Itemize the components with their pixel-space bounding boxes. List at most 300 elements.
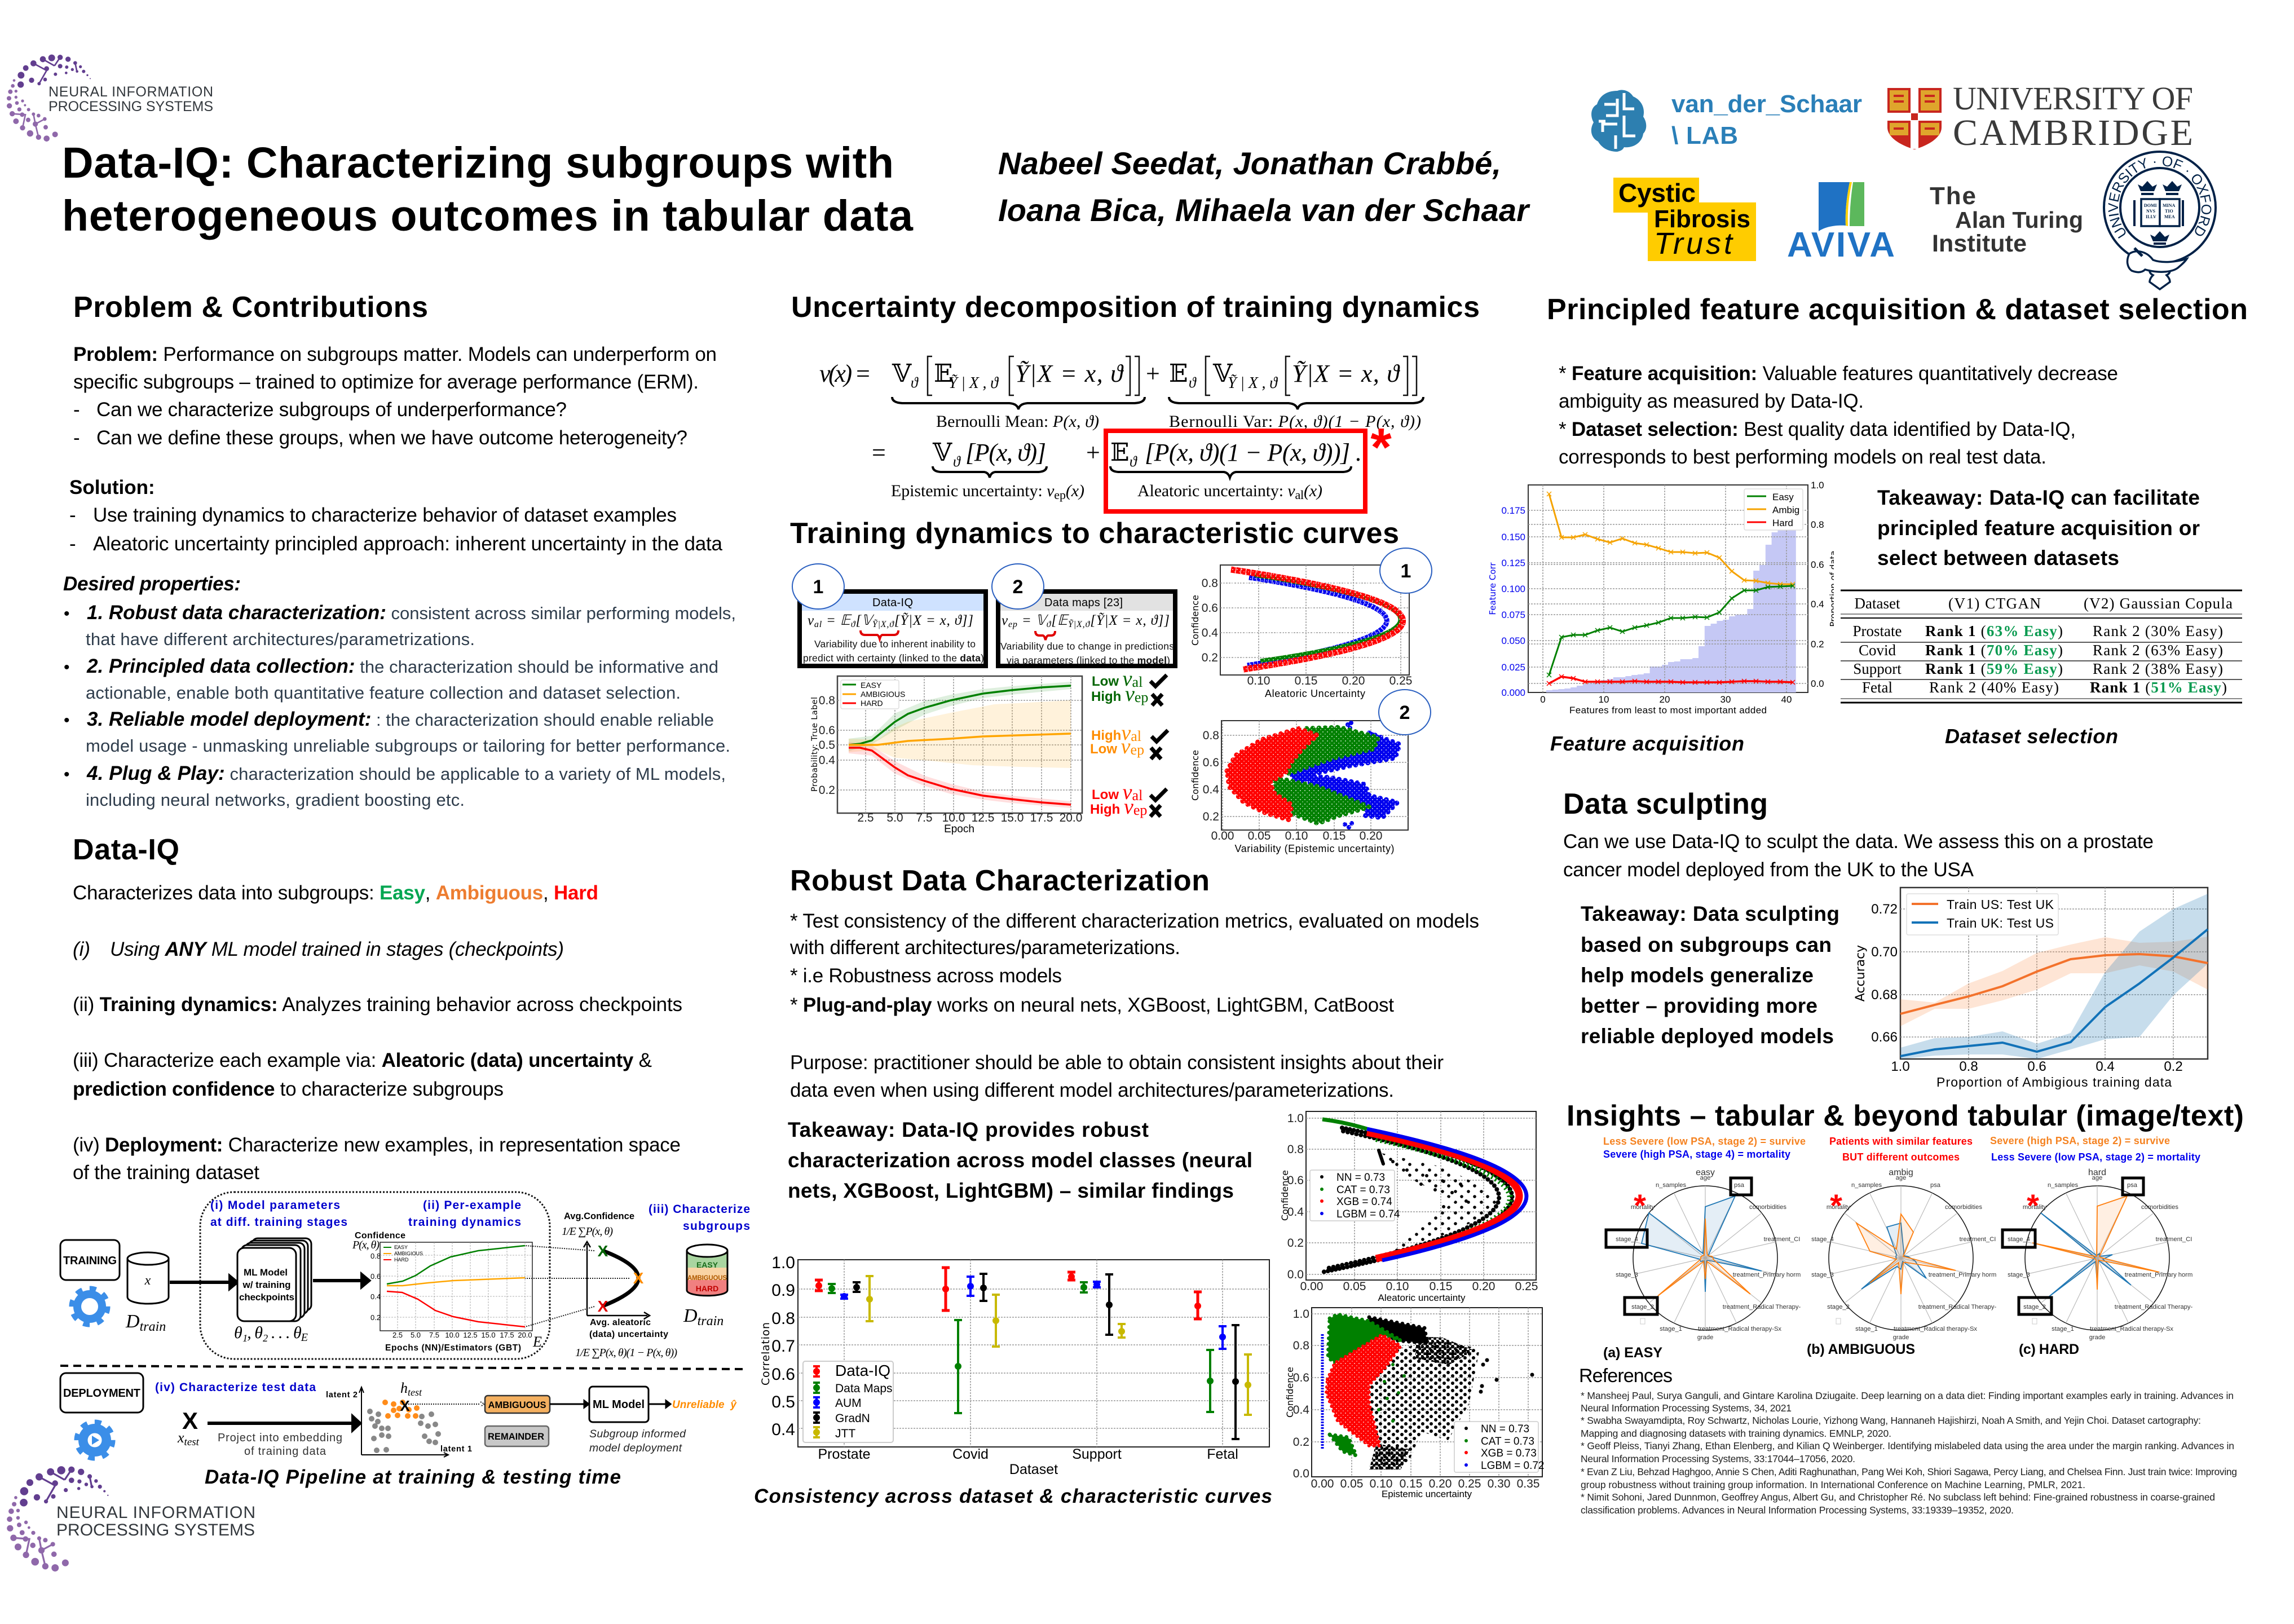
chart: multi-model aleatoric scatter: 1.0: [1287, 1112, 1304, 1125]
text block: Can we use Data-IQ to sculpt the data. We assess this on a prostate: [1563, 831, 2154, 853]
text block: steps: (iv) Deployment: Characterize new examples, in representation space: [73, 1134, 681, 1156]
radar: hard: stage_3: [2008, 1272, 2030, 1278]
insight notes: ambiguous: Patients with similar features: [1829, 1136, 1973, 1147]
chart: multi-model aleatoric scatter: 0.05: [1343, 1280, 1366, 1293]
heading: Data-IQ: [73, 833, 179, 866]
legend: Hard: [1772, 518, 1793, 528]
legend: CAT = 0.73: [1481, 1436, 1534, 1448]
panel: feature acquisition and dataset selection: [1488, 293, 2248, 755]
text block: desired properties: •: [64, 711, 70, 730]
chart: accuracy by proportion: 0.68: [1871, 987, 1898, 1003]
chart: confidence vs aleatoric: 0.4: [1202, 626, 1218, 639]
text block: desired properties: •: [64, 604, 70, 623]
equation: +: [1146, 360, 1160, 387]
text block: desired properties: 4. Plug & Play: characterization should be applicable to a variety of ML models,: [86, 762, 726, 784]
takeaway: nets, XGBoost, LightGBM) – similar findings: [788, 1179, 1234, 1202]
insight notes: hard: Less Severe (low PSA, stage 2) = mortality: [1991, 1151, 2200, 1163]
box: Data maps formula: Ỹ|X,ϑ: [1068, 619, 1091, 629]
label: projection: [218, 1432, 342, 1458]
annotation: hard: ep: [1133, 802, 1147, 818]
arrow: model to output: [649, 1401, 670, 1407]
box: Data-IQ formula: [Ỹ|X = x, ϑ]]: [894, 612, 973, 628]
text block: steps: (iii) Characterize each example via: Aleatoric (data) uncertainty &: [73, 1049, 652, 1071]
text block: * i.e Robustness across models: [790, 965, 1062, 987]
insight notes: ambiguous: [1829, 1136, 1973, 1163]
annotation: easy: Low v: [1092, 667, 1132, 691]
red asterisk: *: [1370, 417, 1392, 478]
chart: per-example confidence curves: 0.4: [370, 1292, 381, 1301]
labels: pipeline steps i and ii: [210, 1199, 521, 1229]
panel: problem and contributions: [63, 291, 736, 810]
radar: hard: hard: [2088, 1168, 2106, 1177]
reference list: Mapping and diagnosing datasets with training dynamics. EMNLP, 2020.: [1581, 1428, 1891, 1439]
test point: X: [182, 1407, 198, 1434]
chart: confidence vs aleatoric: Confidence: [1190, 595, 1201, 646]
chart: multi-model epistemic scatter: 0.05: [1340, 1477, 1363, 1490]
annotation: ambiguous: [1090, 721, 1168, 759]
text block: desired properties: •: [64, 658, 70, 677]
logo: Aviva: [1787, 182, 1895, 264]
logo: NeurIPS bottom: [7, 1466, 255, 1572]
chart: confidence vs variability: 0.4: [1203, 783, 1219, 796]
logo: Alan Turing Institute: Alan Turing: [1955, 207, 2083, 233]
text block: [1559, 363, 2118, 468]
radar: hard: stage_4: [2008, 1236, 2030, 1243]
text block: Purpose: practitioner should be able to obtain consistent insights about their: [790, 1052, 1444, 1074]
stack: ML model checkpoints: w/ training: [242, 1279, 291, 1290]
insight notes: easy: Less Severe (low PSA, stage 2) = survive: [1603, 1136, 1806, 1147]
legend: Data Maps: [835, 1382, 893, 1395]
equation: Bernoulli Var: P(x, ϑ)(1 − P(x, ϑ)): [1169, 412, 1421, 431]
labels: step iii and subgroup cylinder: EASY: [696, 1260, 718, 1269]
text block: desired properties: •: [64, 765, 70, 784]
authors: Nabeel Seedat, Jonathan Crabbé,: [998, 145, 1501, 181]
chart: accuracy by proportion: 0.72: [1871, 902, 1898, 917]
chart: latent embedding: X: [400, 1397, 410, 1414]
chart: latent embedding: latent 1: [440, 1445, 472, 1454]
chart: probability over epochs: 0.8: [819, 694, 835, 707]
stack: ML model checkpoints: E: [301, 1331, 308, 1344]
insight notes: hard: [1990, 1135, 2200, 1163]
chart: feature acquisition: [1488, 480, 1838, 716]
logo: University of Oxford crest: ILLV: [2146, 214, 2156, 219]
radar: easy: [1606, 1168, 1801, 1341]
chart: correlation error bars: Correlation: [760, 1322, 772, 1385]
chart: accuracy by proportion: 1.0: [1891, 1059, 1910, 1074]
radar: ambiguous: treatment_Primary horm: [1929, 1272, 1996, 1278]
chart: probability over epochs: EASY: [861, 681, 882, 690]
badge 1: 1: [813, 576, 823, 598]
chart: feature acquisition: 0.0: [1811, 678, 1824, 689]
chart: feature acquisition: Proportion of data: [1828, 550, 1838, 627]
radar captions: (a) EASY: [1603, 1345, 1662, 1361]
text block: problem: [73, 343, 717, 449]
chart: probability over epochs: 0.5: [819, 739, 835, 752]
annotation: easy: al: [1132, 674, 1142, 690]
equation: ϑ: [1189, 374, 1197, 391]
chart: feature acquisition: 0.8: [1811, 519, 1824, 530]
box: Data-IQ formula: = 𝔼: [822, 613, 852, 628]
table: dataset selection: Rank 1 (59% Easy): [1925, 660, 2063, 677]
radar: easy: comorbidities: [1749, 1204, 1786, 1211]
radar: hard: grade: [2089, 1334, 2105, 1341]
insight notes: easy: Severe (high PSA, stage 4) = mortality: [1603, 1149, 1790, 1160]
chart: per-example confidence curves: 5.0: [411, 1331, 421, 1339]
radar: easy: grade: [1697, 1334, 1713, 1341]
text block: solution: -: [69, 533, 76, 555]
chart: confidence vs aleatoric: 0.25: [1389, 674, 1412, 687]
chart: probability over epochs: 5.0: [886, 811, 903, 824]
table: dataset selection: Prostate: [1853, 623, 1902, 639]
chart: per-example confidence curves: EASY: [394, 1245, 408, 1250]
table: dataset selection: Covid: [1859, 642, 1896, 659]
takeaway: Takeaway: Data-IQ can facilitate: [1877, 486, 2200, 509]
labels: step iii and subgroup cylinder: subgroups: [683, 1220, 750, 1233]
heading: Robust Data Characterization: [790, 864, 1210, 897]
chart: confidence vs variability: 0.10: [1285, 829, 1308, 842]
chart: per-example confidence curves: E: [532, 1334, 542, 1350]
chart: confidence vs variability: 0.2: [1203, 810, 1219, 823]
labels: pipeline steps i and ii: (i) Model parameters: [210, 1199, 340, 1212]
radar: ambiguous: comorbidities: [1945, 1204, 1982, 1211]
references: [1579, 1365, 2237, 1516]
legend: Train US: Test UK: [1947, 897, 2054, 912]
caption: Consistency across dataset & characteristic curves: [754, 1485, 1272, 1507]
logo: University of Cambridge: CAMBRIDGE: [1953, 112, 2193, 153]
chart: feature acquisition: 0.075: [1501, 610, 1525, 620]
chart: characteristic curve schematic: X: [633, 1269, 644, 1287]
heading: Principled feature acquisition & dataset selection: [1547, 293, 2248, 326]
logo: NeurIPS top: [7, 55, 213, 142]
chart: probability over epochs: AMBIGIOUS: [861, 690, 905, 699]
equation: (x): [1066, 482, 1084, 500]
radar: ambiguous: treatment_CI: [1960, 1236, 1996, 1243]
text block: problem: -: [73, 399, 80, 421]
chart: per-example confidence curves: 0.6: [370, 1272, 381, 1281]
chart: latent embedding: h: [400, 1380, 408, 1396]
caption: Data-IQ Pipeline at training & testing time: [205, 1466, 621, 1488]
chart: feature acquisition: 30: [1721, 694, 1731, 705]
logo: University of Cambridge: [1887, 80, 2193, 153]
takeaway: reliable deployed models: [1581, 1025, 1834, 1048]
labels: step iii and subgroup cylinder: [649, 1203, 750, 1329]
equation: [P(x, ϑ)]: [965, 439, 1046, 466]
logo: Cystic Fibrosis Trust: [1613, 178, 1756, 261]
text block: ambiguity as measured by Data-IQ.: [1559, 390, 1864, 412]
takeaway: principled feature acquisition or: [1877, 517, 2200, 540]
badge 1: [792, 564, 844, 609]
legend: AUM: [835, 1397, 862, 1410]
divider dashed line: [60, 1366, 744, 1369]
radar: hard: n_samples: [2048, 1182, 2078, 1189]
chart: feature acquisition: 1.0: [1811, 480, 1824, 491]
legend: LGBM = 0.72: [1481, 1460, 1544, 1472]
chart: feature acquisition: 0.2: [1811, 639, 1824, 650]
box: Data maps formula: ϑ: [1047, 620, 1052, 629]
chart: accuracy by proportion: 0.4: [2096, 1059, 2115, 1074]
badge 2: 2: [1013, 576, 1023, 598]
chart: characteristic curve schematic: Avg. aleatoric: [590, 1318, 651, 1327]
text block: solution: Use training dynamics to characterize behavior of dataset examples: [93, 504, 677, 526]
table: dataset selection: Rank 2 (63% Easy): [2093, 642, 2223, 659]
callout: aleatoric highlight: [1106, 431, 1365, 511]
legend: CAT = 0.73: [1336, 1184, 1390, 1196]
icon: Cambridge shield: [1887, 88, 1942, 149]
chart: characteristic curve schematic: (data) uncertainty: [589, 1330, 668, 1339]
table: dataset selection: Rank 1 (63% Easy): [1925, 623, 2063, 639]
chart: confidence vs variability: [1190, 721, 1408, 854]
text block: data even when using different model architectures/parameterizations.: [790, 1079, 1394, 1101]
chart: feature acquisition: Feature Corr: [1488, 562, 1498, 615]
annotation: easy: [1091, 667, 1167, 706]
logo: NeurIPS top: PROCESSING SYSTEMS: [48, 99, 213, 114]
labels: pipeline steps i and ii: training dynamics: [408, 1216, 521, 1229]
chart: multi-model aleatoric scatter: 0.25: [1515, 1280, 1538, 1293]
chart: per-example confidence curves: 12.5: [463, 1331, 478, 1339]
text block: desired properties: 3. Reliable model deployment: : the characterization should enable reliable: [87, 708, 714, 730]
text block: cancer model deployed from the UK to the USA: [1563, 859, 1974, 881]
box: Data maps formula: [998, 592, 1175, 666]
chart: per-example confidence curves: 0.2: [370, 1313, 381, 1322]
radar: ambiguous: stage_1: [1855, 1326, 1878, 1332]
chart: multi-model epistemic scatter: 1.0: [1293, 1308, 1309, 1321]
chart: probability over epochs: Probability: True Label: [810, 697, 819, 792]
chart: per-example confidence curves: Epochs (NN)/Estimators (GBT): [385, 1343, 521, 1353]
chart: multi-model epistemic scatter: 0.25: [1458, 1477, 1481, 1490]
badge 1 chart: [1380, 548, 1432, 593]
radar: hard: treatment_Radical Therapy-: [2115, 1304, 2193, 1310]
chart: per-example confidence curves: Confidence: [355, 1231, 405, 1241]
radar: easy: n_samples: [1656, 1182, 1686, 1189]
chart: probability over epochs: 20.0: [1060, 811, 1082, 824]
title: heterogeneous outcomes in tabular data: [62, 192, 914, 240]
labels: pipeline steps i and ii: at diff. training stages: [210, 1216, 347, 1229]
box: ambiguous: AMBIGUOUS: [488, 1400, 546, 1410]
chart: feature acquisition: 40: [1781, 694, 1792, 705]
text block: solution: -: [69, 504, 76, 526]
equation: ep: [1054, 488, 1066, 502]
radar: easy: psa: [1734, 1182, 1745, 1189]
legend: LGBM = 0.74: [1336, 1208, 1400, 1220]
logo: Alan Turing Institute: The: [1930, 182, 1976, 210]
chart: confidence vs variability: Variability (Epistemic uncertainty): [1235, 843, 1394, 854]
legend: NN = 0.73: [1481, 1423, 1529, 1435]
box: ambiguous: [485, 1396, 550, 1413]
table: dataset selection: Rank 2 (38% Easy): [2093, 660, 2223, 677]
chart: probability over epochs: 12.5: [972, 811, 994, 824]
chart: correlation error bars: Support: [1072, 1446, 1122, 1462]
chart: feature acquisition: 0.000: [1501, 687, 1525, 698]
chart: confidence vs aleatoric: 0.10: [1247, 674, 1270, 687]
radar: ambiguous: n_samples: [1851, 1182, 1882, 1189]
chart: characteristic curve schematic: [525, 1211, 677, 1359]
text block: desired properties: that have different architectures/parametrizations.: [86, 629, 475, 649]
radar captions: [1603, 1341, 2079, 1361]
takeaway: help models generalize: [1581, 964, 1814, 987]
reference list: [1581, 1390, 2237, 1516]
logo: University of Oxford crest: TIO: [2165, 209, 2173, 214]
table: dataset selection: (V1) CTGAN: [1948, 595, 2041, 612]
chart: accuracy by proportion: Accuracy: [1854, 945, 1868, 1001]
equation: 𝕍: [932, 439, 952, 466]
logo: Alan Turing Institute: [1930, 182, 2083, 257]
legend: [1744, 489, 1803, 530]
arrow: model to dynamics: [313, 1275, 369, 1286]
radar: easy: treatment_Radical Therapy-: [1723, 1304, 1801, 1310]
heading: Problem & Contributions: [73, 291, 428, 324]
annotation: hard: High v: [1090, 795, 1133, 819]
chart: multi-model epistemic scatter: 0.8: [1293, 1339, 1309, 1352]
box: Data maps formula: [𝔼: [1051, 613, 1069, 628]
equation: 𝔼: [1110, 439, 1130, 466]
box: Data-IQ formula: ϑ: [851, 620, 856, 629]
text block: steps: (i): [73, 938, 90, 960]
chart: feature acquisition: 0.4: [1811, 599, 1824, 610]
box: Data maps formula: v: [1002, 613, 1008, 628]
text block: * Dataset selection: Best quality data identified by Data-IQ,: [1559, 418, 2076, 440]
reference list: Neural Information Processing Systems, 34, 2021: [1581, 1402, 1792, 1414]
annotation: hard: al: [1132, 787, 1142, 804]
legend: Train UK: Test US: [1947, 916, 2054, 930]
radar: hard: mortality: [2023, 1204, 2047, 1211]
panel: uncertainty decomposition: [791, 291, 1480, 511]
equation: [P(x, ϑ)(1 − P(x, ϑ))] .: [1145, 439, 1362, 466]
logo: University of Oxford crest: NVS: [2146, 209, 2156, 214]
radar: hard: stage_2: [2023, 1304, 2046, 1310]
chart: correlation error bars: 0.8: [771, 1309, 795, 1328]
logo: University of Oxford crest: UNIVERSITY · OF · OXFORD: [2108, 157, 2212, 239]
equation: 𝔼: [1169, 360, 1188, 387]
text block: problem: specific subgroups – trained to optimize for average performance (ERM).: [73, 371, 699, 393]
chart: per-example confidence curves: 10.0: [445, 1331, 460, 1339]
takeaway: better – providing more: [1581, 994, 1817, 1017]
annotation: ambiguous: ep: [1131, 742, 1144, 758]
chart: per-example confidence curves: 17.5: [500, 1331, 514, 1339]
takeaway: select between datasets: [1877, 546, 2119, 570]
chart: accuracy by proportion: 0.8: [1959, 1059, 1978, 1074]
radar: easy: easy: [1696, 1168, 1715, 1177]
table: dataset selection: Rank 1 (70% Easy): [1925, 642, 2063, 659]
table: dataset selection: Rank 1 (51% Easy): [2090, 679, 2227, 696]
annotation: easy: High v: [1091, 682, 1135, 706]
radar: ambiguous: *: [1830, 1188, 1842, 1223]
logo: Alan Turing Institute: Institute: [1932, 230, 2027, 257]
annotation: easy: ep: [1135, 689, 1148, 705]
box: Data-IQ formula: al: [814, 620, 822, 629]
box: Data maps formula: Data maps [23]: [1044, 597, 1123, 609]
chart: confidence vs variability: 0.15: [1323, 829, 1345, 842]
legend: Data-IQ: [835, 1362, 890, 1379]
chart: accuracy by proportion: 0.70: [1871, 945, 1898, 960]
label: unreliable: Unreliable ŷ: [672, 1399, 737, 1411]
chart: per-example confidence curves: 2.5: [392, 1331, 403, 1339]
equation: [819, 356, 1423, 502]
text block: desired properties: actionable, enable both quantitative feature collection and dataset selection.: [86, 683, 681, 703]
chart: correlation error bars: Dataset: [1009, 1462, 1058, 1477]
box: training: TRAINING: [63, 1255, 117, 1267]
heading: Data sculpting: [1563, 788, 1768, 820]
chart: confidence vs variability: Confidence: [1190, 750, 1201, 801]
chart: confidence vs aleatoric: [1190, 565, 1412, 699]
icon: brain: [1591, 90, 1646, 152]
box: Data-IQ formula: Ỹ|X,ϑ: [872, 619, 894, 629]
stack: ML model checkpoints: ML Model: [244, 1267, 288, 1278]
chart: multi-model epistemic scatter: [1285, 1308, 1544, 1499]
chart: feature acquisition: 0.150: [1501, 532, 1525, 542]
chart: characteristic curve schematic: X: [598, 1298, 608, 1315]
radar: ambiguous: [1811, 1168, 1997, 1341]
panel: robust data characterization: [754, 864, 1544, 1507]
box: Data-IQ formula: [𝕍: [855, 613, 875, 628]
text block: problem: Can we characterize subgroups of underperformance?: [96, 399, 567, 421]
chart: feature acquisition: 0.050: [1501, 636, 1525, 646]
chart: multi-model aleatoric scatter: 0.8: [1287, 1143, 1304, 1156]
chart: feature acquisition: 0.100: [1501, 584, 1525, 594]
box: ML model: [589, 1387, 649, 1422]
chart: multi-model aleatoric scatter: 0.2: [1287, 1237, 1304, 1250]
chart: correlation error bars: 0.9: [771, 1281, 795, 1300]
chart: multi-model epistemic scatter: 0.00: [1311, 1477, 1334, 1490]
reference list: * Nimit Sohoni, Jared Dunnmon, Geoffrey Angus, Albert Gu, and Christopher Ré. No subclass left behind: Fine-grained robustness in coarse-grained: [1581, 1491, 2215, 1503]
chart: accuracy by proportion: 0.6: [2027, 1059, 2046, 1074]
diagram: Data-IQ pipeline: [60, 1192, 750, 1488]
legend: Easy: [1772, 492, 1794, 502]
radar: ambiguous: ambig: [1889, 1168, 1913, 1177]
chart: characteristic curve schematic: 1/E ∑P(x, θ): [562, 1225, 613, 1238]
radar: easy: stage_2: [1631, 1304, 1654, 1310]
radar: easy: stage_3: [1616, 1272, 1638, 1278]
radar: hard: psa: [2127, 1182, 2138, 1189]
chart: correlation error bars: Covid: [952, 1446, 989, 1462]
chart: confidence vs aleatoric: Aleatoric Uncertainty: [1265, 688, 1365, 699]
text block: problem: -: [73, 427, 80, 449]
chart: confidence vs variability: 0.00: [1211, 829, 1234, 842]
chart: per-example confidence curves: AMBIGIOUS: [394, 1251, 423, 1256]
chart: characteristic curve schematic: Avg.Confidence: [564, 1211, 634, 1221]
takeaway: [788, 1118, 1252, 1202]
reference list: Neural Information Processing Systems, 33:17044–17056, 2020.: [1581, 1453, 1855, 1464]
label: projection: of training data: [244, 1445, 327, 1458]
takeaway: Takeaway: Data-IQ provides robust: [788, 1118, 1149, 1141]
stack: ML model checkpoints: θ₁, θ₂ . . . θ: [234, 1323, 302, 1342]
equation: Ỹ|X,ϑ: [949, 374, 999, 392]
text block: subgroups: Characterizes data into subgroups: Easy, Ambiguous, Hard: [73, 882, 598, 904]
radar: easy: treatment_Radical therapy-Sx: [1698, 1326, 1781, 1332]
labels: step iii and subgroup cylinder: HARD: [696, 1284, 718, 1293]
takeaway: [1877, 486, 2200, 570]
text block: solution: Aleatoric uncertainty principled approach: inherent uncertainty in the data: [93, 533, 723, 555]
radar: easy: age: [1700, 1175, 1710, 1181]
authors: [998, 145, 1530, 228]
equation: Ỹ|X = x, ϑ: [1292, 360, 1400, 387]
text block: desired properties: including neural networks, gradient boosting etc.: [86, 790, 465, 810]
text block: steps: (ii) Training dynamics: Analyzes training behavior across checkpoints: [73, 994, 682, 1016]
arrow: data to model: [170, 1277, 237, 1288]
chart: multi-model aleatoric scatter: 0.0: [1287, 1268, 1304, 1281]
box: deployment: [60, 1373, 143, 1413]
chart: feature acquisition: 10: [1599, 694, 1609, 705]
chart: multi-model aleatoric scatter: 0.4: [1287, 1206, 1304, 1219]
radar: ambiguous: stage_3: [1811, 1272, 1834, 1278]
chart: feature acquisition: 0.025: [1501, 662, 1525, 673]
chart: multi-model epistemic scatter: 0.15: [1400, 1477, 1422, 1490]
box: Data-IQ formula: Variability due to inherent inability to: [814, 638, 976, 650]
annotation: ambiguous: al: [1131, 728, 1141, 744]
radar: hard: *: [2027, 1188, 2039, 1223]
chart: feature acquisition: 0.125: [1501, 558, 1525, 568]
legend: [1310, 1170, 1400, 1221]
arrow: dotted to ambiguous: [408, 1402, 484, 1406]
